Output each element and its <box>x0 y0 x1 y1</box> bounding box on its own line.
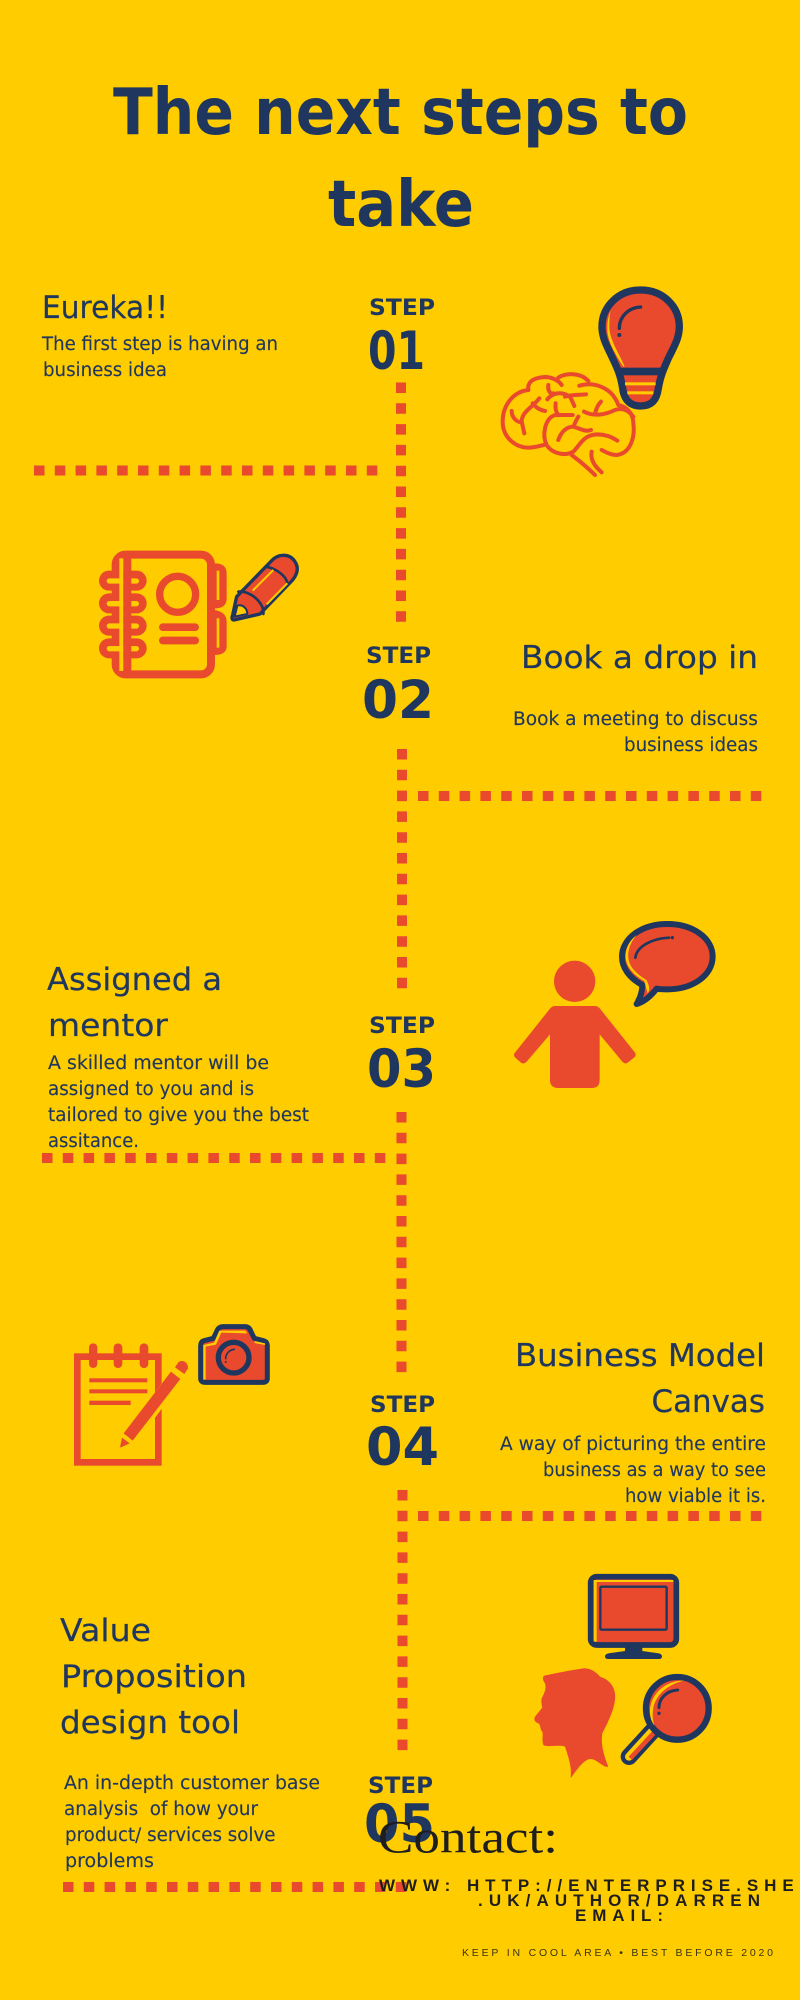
connector: step 5 dotted line <box>63 1882 407 1892</box>
step 5 label: STEP <box>368 1773 433 1799</box>
text block: step 2 description <box>513 709 758 756</box>
icon: camera <box>201 1327 267 1382</box>
text block: step 5 description: problems <box>65 1851 154 1872</box>
step 1 label <box>368 295 435 382</box>
panel: step 2 <box>99 555 762 989</box>
step 1 label: 01 <box>368 321 425 382</box>
step 3 label: 03 <box>367 1039 436 1100</box>
icon: computer monitor <box>591 1577 676 1659</box>
icon: person <box>514 961 636 1088</box>
heading: Business Model Canvas: Business Model <box>515 1338 765 1374</box>
heading: Value Proposition design tool: Proposition <box>61 1659 247 1695</box>
step 2 label: 02 <box>362 670 434 731</box>
text block: step 5 description: An in-depth customer base <box>64 1773 320 1794</box>
panel: contact <box>378 1812 800 1959</box>
panel: step 4 <box>77 1327 766 1751</box>
connector: step 1 dotted lines <box>34 382 401 622</box>
footer note: KEEP IN COOL AREA • BEST BEFORE 2020 <box>462 1947 773 1959</box>
icon: brain <box>503 374 634 475</box>
heading: Assigned a mentor: mentor <box>48 1008 168 1044</box>
text block: step 4 description: business as a way to see <box>543 1460 766 1481</box>
text block: contact details <box>379 1876 800 1925</box>
step 5 label: 05 <box>364 1794 435 1855</box>
text block: step 3 description <box>48 1053 309 1152</box>
text block: step 3 description: tailored to give you the best <box>48 1105 309 1126</box>
step 4 label: 04 <box>366 1417 439 1478</box>
text block: step 3 description: A skilled mentor will be <box>48 1053 269 1074</box>
icon: pencil <box>232 555 297 620</box>
text block: step 4 description <box>500 1434 766 1507</box>
heading: Business Model Canvas: Canvas <box>652 1384 765 1420</box>
heading: Assigned a mentor: Assigned a <box>47 962 222 998</box>
panel: step 1 <box>34 290 679 622</box>
step 2 label: STEP <box>366 643 431 669</box>
connector: step 4 dotted lines <box>402 1490 762 1751</box>
heading: Book a drop in: Book a drop in <box>521 640 758 676</box>
icon: notepad and pen <box>77 1343 188 1462</box>
text block: contact details: WWW: HTTP://ENTERPRISE.SHEF <box>379 1876 800 1895</box>
step 3 label: STEP <box>369 1013 435 1039</box>
text block: step 4 description: how viable it is. <box>625 1486 766 1507</box>
icon: magnifying glass <box>629 1677 709 1758</box>
connector: step 3 dotted lines <box>42 1112 402 1373</box>
panel: step 3 <box>42 924 713 1373</box>
text block: contact details: EMAIL: <box>575 1906 663 1925</box>
text block: step 5 description <box>64 1773 320 1872</box>
heading: Business Model Canvas <box>515 1338 765 1420</box>
text block: step 5 description: analysis of how your <box>64 1799 258 1820</box>
connector: step 2 dotted lines <box>402 749 762 989</box>
text block: step 3 description: assitance. <box>48 1131 139 1152</box>
text block: step 2 description: Book a meeting to discuss <box>513 709 758 730</box>
icon: address notebook <box>99 555 227 674</box>
title: The next steps to <box>113 76 688 150</box>
step 4 label: STEP <box>370 1392 435 1418</box>
icon: speech bubble <box>622 924 713 1004</box>
heading: Assigned a mentor <box>47 962 222 1044</box>
title: take <box>328 168 474 242</box>
text block: contact details: .UK/AUTHOR/DARREN <box>478 1891 760 1910</box>
text block: step 1 description: The first step is having an <box>41 334 278 355</box>
heading: contact: Contact: <box>378 1812 558 1864</box>
text block: step 2 description: business ideas <box>624 735 758 756</box>
text block: step 4 description: A way of picturing the entire <box>500 1434 766 1455</box>
icon: light bulb <box>602 290 679 406</box>
step 3 label <box>367 1013 436 1100</box>
heading: Value Proposition design tool: Value <box>60 1613 151 1649</box>
heading: Value Proposition design tool: design tool <box>60 1705 240 1741</box>
title <box>113 76 688 242</box>
step 1 label: STEP <box>369 295 435 321</box>
panel: step 5 <box>60 1577 709 1887</box>
text block: step 3 description: assigned to you and is <box>48 1079 254 1100</box>
text block: step 1 description: business idea <box>43 360 167 381</box>
text block: step 1 description <box>41 334 278 381</box>
icon: head silhouette <box>534 1668 615 1778</box>
heading: Eureka: Eureka!! <box>42 290 168 326</box>
text block: step 5 description: product/ services solve <box>65 1825 276 1846</box>
step 2 label <box>362 643 434 731</box>
heading: Value Proposition design tool <box>60 1613 247 1741</box>
